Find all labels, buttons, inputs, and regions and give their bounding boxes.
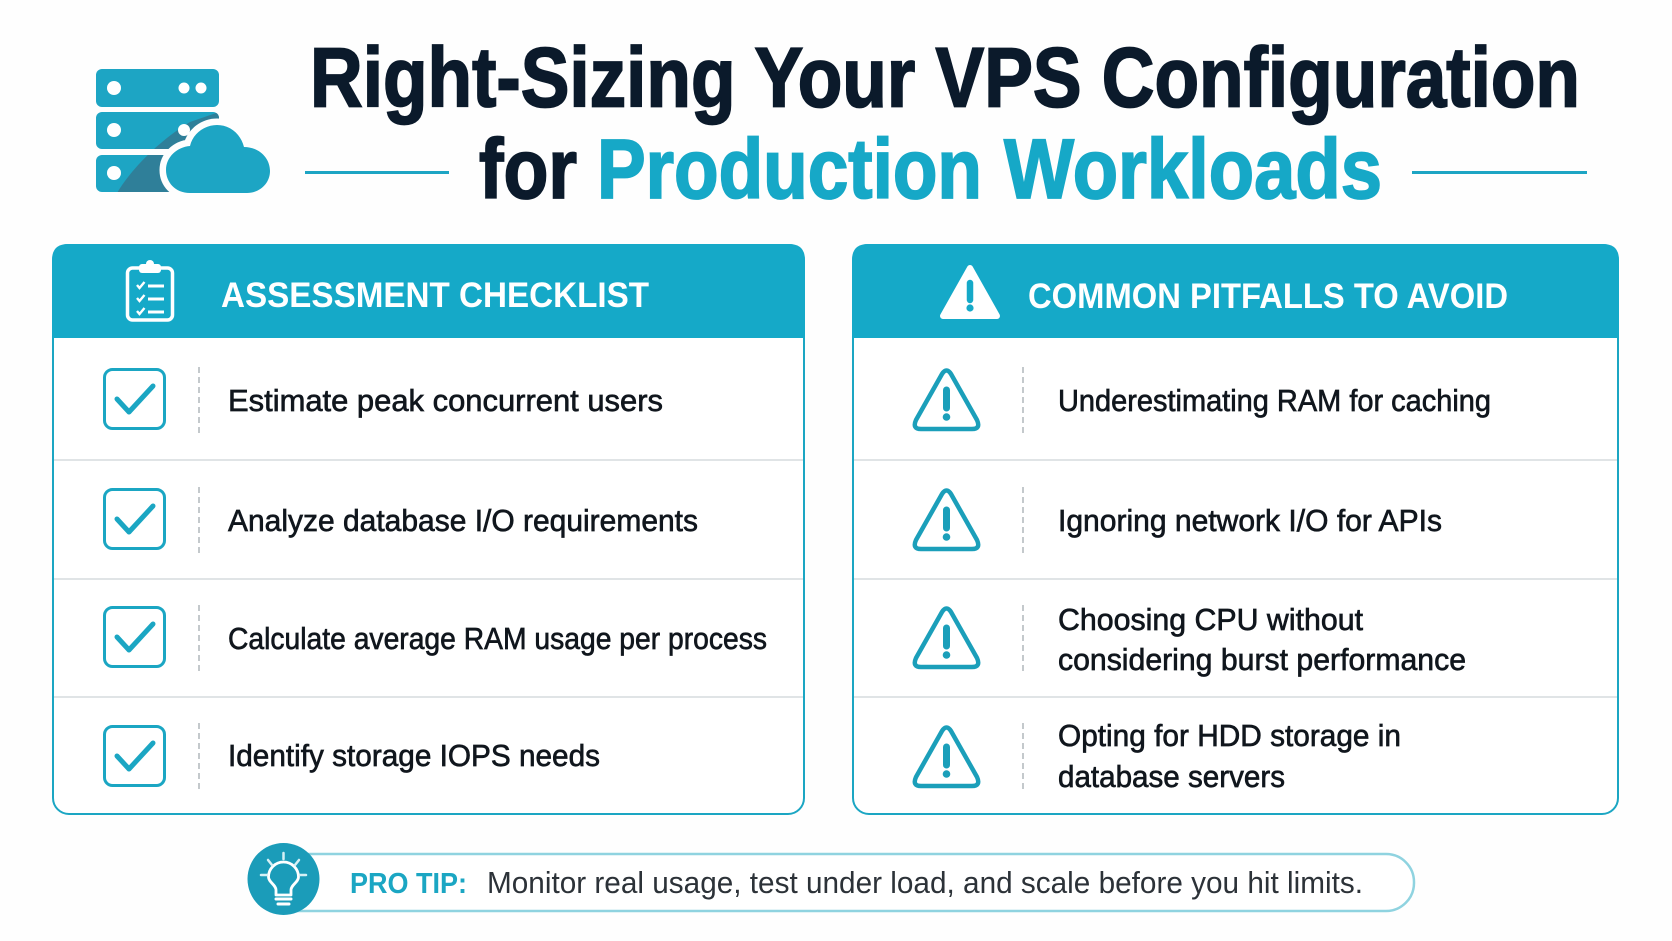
row: CPU burst: Choosing CPU without	[1058, 603, 1364, 637]
callout: pro tip	[248, 843, 1414, 915]
row: database I/O: Analyze database I/O requirements	[228, 504, 698, 538]
row: storage IOPS: Identify storage IOPS needs	[228, 739, 600, 773]
row: RAM usage	[104, 605, 767, 671]
callout: pro tip: PRO TIP:	[350, 868, 467, 900]
panel: assessment checklist	[52, 244, 805, 814]
row: HDD storage: database servers	[1058, 760, 1285, 794]
row: RAM for caching	[915, 367, 1491, 433]
row: RAM for caching: Underestimating RAM for caching	[1058, 384, 1491, 418]
panel header: common pitfalls: COMMON PITFALLS TO AVOID	[1028, 277, 1508, 316]
callout: pro tip: Monitor real usage, test under load, and scale before you hit limits.	[487, 865, 1363, 900]
panel: common pitfalls	[852, 244, 1619, 814]
icon: server rack with cloud	[96, 69, 270, 193]
panel header: assessment checklist	[52, 244, 805, 338]
row: network I/O: Ignoring network I/O for APIs	[1058, 504, 1442, 538]
row: estimate peak users	[104, 367, 663, 433]
row: storage IOPS	[104, 723, 600, 789]
title: for	[479, 122, 577, 216]
title: Production	[597, 122, 982, 216]
row: RAM usage: Calculate average RAM usage per process	[228, 622, 767, 656]
row: HDD storage	[915, 719, 1401, 794]
panel header: common pitfalls	[852, 244, 1619, 338]
row: estimate peak users: Estimate peak concurrent users	[228, 384, 663, 418]
row: network I/O	[915, 487, 1442, 553]
panel header: assessment checklist: ASSESSMENT CHECKLIST	[221, 276, 649, 315]
row: CPU burst: considering burst performance	[1058, 643, 1466, 677]
row: HDD storage: Opting for HDD storage in	[1058, 719, 1401, 753]
icon: light bulb	[248, 843, 320, 915]
title	[305, 30, 1587, 216]
row: CPU burst	[915, 603, 1466, 677]
row: database I/O	[104, 487, 698, 553]
title: Workloads	[1004, 122, 1382, 216]
